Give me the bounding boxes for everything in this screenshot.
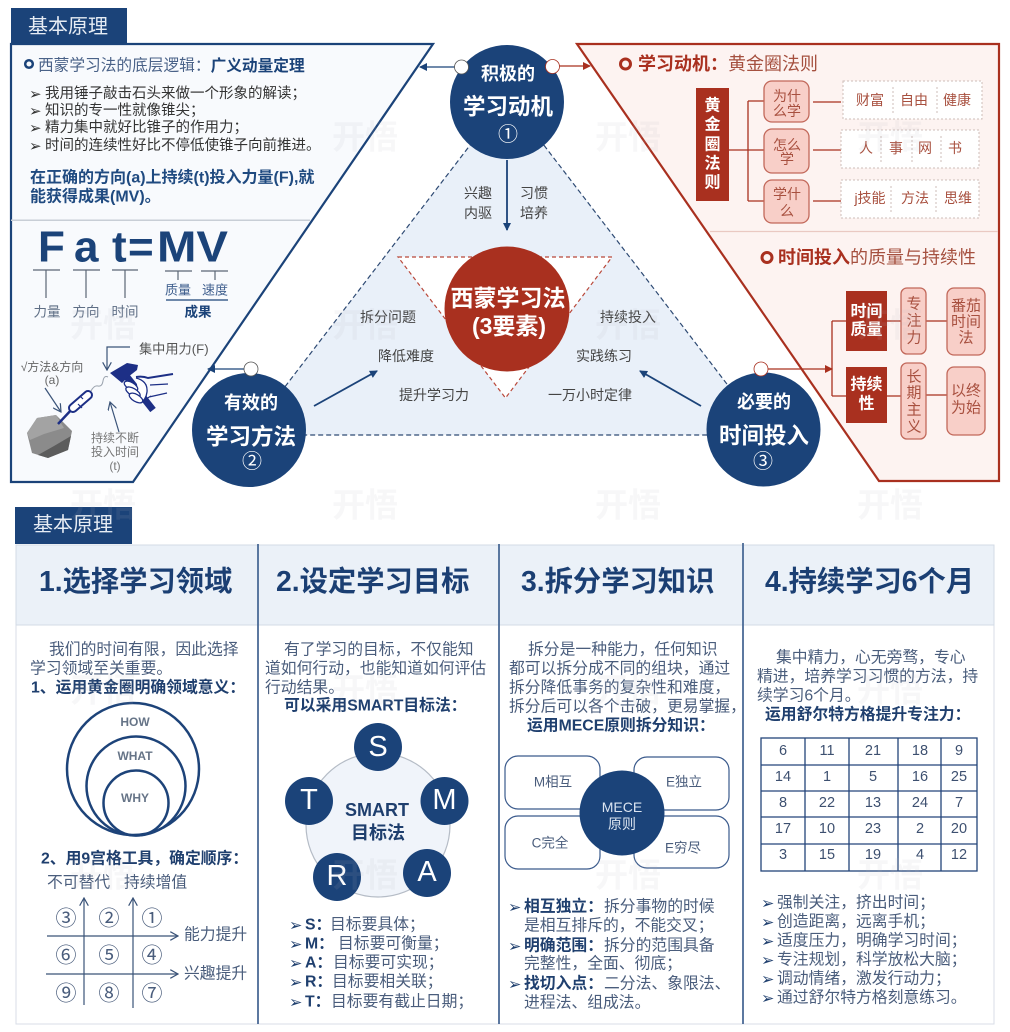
golden circle tree: 么 [780, 203, 794, 219]
Schulte grid: 3 [779, 847, 787, 863]
circle: 积极的学习动机: ① [498, 123, 518, 146]
Schulte grid: 1 [823, 769, 831, 785]
SMART list: ➢ [289, 992, 302, 1012]
formula brackets and labels: 质量 [165, 282, 191, 298]
golden circle tree: 学 [780, 151, 794, 167]
column 1 title: 1.选择学习领域 [39, 565, 232, 597]
golden circle tree: 健康 [943, 92, 971, 108]
center circle: 西蒙学习法 [444, 246, 570, 372]
SMART list: 目标要可实现； [333, 954, 444, 972]
SMART diagram [285, 723, 468, 901]
column 1 intro: 学习领域至关重要。 [30, 660, 172, 678]
Schulte grid: 25 [951, 769, 967, 785]
hammer analogy bullets: 知识的专一性就像锥尖； [45, 102, 204, 119]
SMART list: ➢ [289, 916, 302, 934]
watermark: 开悟: 开悟 [595, 306, 661, 344]
golden circle tree: 为什 [773, 88, 801, 104]
golden circle tree: 圈 [704, 136, 721, 154]
time investment heading: 时间投入的质量与持续性 [778, 248, 976, 268]
MECE diagram: E穷尽 [665, 840, 701, 856]
circle: 必要的时间投入: 必要的 [737, 392, 791, 412]
hand gripping hammer [123, 374, 173, 405]
MECE diagram: MECE [602, 799, 642, 815]
hammer analogy bullets: ➢ [29, 137, 42, 155]
SMART list: A： [305, 954, 332, 972]
nine-grid chart: ⑥ [56, 944, 76, 968]
triangle labels: 习惯 [520, 185, 548, 201]
MECE list: 拆分事物的时候 [604, 898, 715, 916]
watermark: 开悟: 开悟 [332, 486, 398, 524]
time investment tree: 番茄 [951, 298, 981, 314]
illustration: hammer, chisel and rock: √方法&方向 [21, 359, 83, 374]
Schulte grid: 7 [955, 795, 963, 811]
nine-grid chart: ① [142, 908, 162, 930]
nine-grid chart: ② [98, 908, 120, 930]
focus tips list: 专注规划，科学放松大脑； [777, 950, 967, 968]
golden circle tree: 金 [704, 114, 721, 134]
triangle labels: 兴趣 [464, 185, 492, 201]
MECE list: ➢ [508, 898, 521, 916]
bold conclusion: 能获得成果(MV)。 [30, 186, 161, 206]
formula: F a t = MV: t [112, 222, 127, 272]
SMART list: ➢ [289, 934, 302, 954]
triangle labels: 提升学习力 [399, 387, 469, 403]
SMART diagram: A [417, 856, 437, 888]
SMART list: T： [305, 994, 330, 1010]
formula: F a t = MV: F [38, 222, 65, 272]
column 1 intro [30, 640, 245, 696]
panel heading: 西蒙学习法的底层逻辑：广义动量定理 [38, 56, 305, 74]
watermark: 开悟: 开悟 [332, 118, 398, 156]
SMART list: S： [305, 916, 331, 934]
golden circle tree: 自由 [900, 92, 928, 108]
Schulte grid: 6 [779, 743, 787, 759]
nine-grid chart: ⑤ [98, 944, 120, 968]
arrow: time to core [640, 371, 701, 406]
golden circle tree: 法 [704, 154, 721, 172]
arrow: method to core [314, 371, 377, 406]
formula brackets and labels: 成果 [184, 304, 212, 320]
formula: F a t = MV [38, 222, 229, 272]
triangle labels: 内驱 [464, 205, 492, 221]
column 4 title: 4.持续学习6个月 [765, 565, 974, 597]
focus tips list: ➢ [761, 988, 774, 1008]
column 1: 选择学习领域 [30, 565, 248, 1008]
triangle labels: 拆分问题 [360, 309, 416, 325]
golden circle tree: 方法 [901, 190, 929, 206]
SMART list [289, 916, 473, 1012]
hammer analogy bullets: ➢ [29, 85, 42, 103]
column 4 intro: 集中精力，心无旁骛，专心 [776, 648, 966, 666]
circle: 必要的时间投入 [706, 362, 820, 486]
Schulte grid: 13 [865, 795, 881, 811]
watermark: 开悟: 开悟 [70, 672, 136, 708]
triangle labels: 实践练习 [576, 348, 632, 364]
circle: 积极的学习动机: 积极的 [481, 64, 535, 84]
SMART list: M： [305, 936, 334, 952]
MECE diagram [505, 756, 729, 869]
hammer handle and head [127, 377, 153, 410]
connector arrows from circles to panels [208, 66, 832, 369]
Schulte grid: 19 [865, 847, 881, 863]
Schulte grid: 11 [819, 743, 835, 759]
time investment tree: 性 [858, 394, 875, 412]
SMART list: 目标要可衡量； [338, 934, 449, 952]
SMART diagram: SMART [345, 800, 409, 820]
golden circle diagram: WHAT [117, 749, 153, 763]
time investment tree: 以终 [951, 382, 981, 400]
panel: 黄金圈法则 and 时间投入 [577, 44, 999, 481]
time investment tree: 时间 [850, 302, 883, 320]
MECE list: ➢ [508, 936, 521, 956]
golden circle tree: 财富 [856, 92, 884, 108]
circle: 有效的学习方法: 学习方法 [206, 424, 296, 450]
formula: F a t = MV: a [74, 222, 99, 272]
triangle labels [360, 185, 656, 403]
watermark: 开悟: 开悟 [595, 118, 661, 156]
Schulte grid: 15 [819, 847, 835, 863]
formula brackets and labels: 时间 [112, 304, 138, 320]
watermark: 开悟: 开悟 [332, 856, 398, 894]
nine-grid chart: ③ [56, 908, 76, 930]
time investment tree: 为始 [951, 400, 981, 416]
column 3 title: 3.拆分学习知识 [521, 565, 714, 597]
time investment tree: 长 [906, 368, 922, 386]
golden circle diagram: WHY [121, 791, 149, 805]
time investment tree: 专 [906, 296, 922, 312]
golden circle tree: 网 [918, 140, 932, 156]
golden circle diagram [67, 703, 199, 836]
nine-grid chart: 兴趣提升 [184, 964, 247, 982]
nine-grid chart: 能力提升 [184, 926, 247, 944]
circle: 积极的学习动机: 学习动机 [463, 94, 553, 120]
Schulte grid: 9 [955, 743, 963, 759]
circle: 有效的学习方法: ② [242, 450, 262, 473]
column 2 intro: 可以采用SMART目标法： [284, 696, 467, 714]
column 3 intro: 运用MECE原则拆分知识： [527, 716, 715, 734]
focus tips list: ➢ [761, 970, 774, 988]
illustration: hammer, chisel and rock: (a) [45, 373, 59, 387]
column 4 intro: 精进，培养学习习惯的方法，持 [757, 668, 978, 686]
nine-grid chart: 不可替代 [47, 874, 110, 892]
focus tips list: ➢ [761, 932, 774, 950]
nine-grid chart: ⑧ [98, 982, 120, 1006]
watermark: 开悟: 开悟 [332, 672, 398, 708]
inverted red triangle [398, 257, 612, 398]
time investment tree: 时间 [951, 314, 981, 330]
MECE list: 进程法、组成法。 [524, 994, 650, 1012]
circle: 必要的时间投入: ③ [753, 450, 773, 473]
golden circle tree: j技能 [853, 190, 886, 206]
circle: 积极的学习动机 [450, 45, 564, 159]
central triangle diagram [248, 97, 766, 435]
triangle labels: 持续投入 [600, 309, 656, 325]
time investment tree: 主 [906, 402, 922, 418]
illustration: hammer, chisel and rock: 持续不断 [91, 430, 139, 445]
arrow: motivation to core [506, 160, 508, 230]
formula: F a t = MV: = [128, 222, 154, 272]
Schulte grid: 24 [912, 795, 928, 811]
circle: 有效的学习方法: 有效的 [224, 393, 278, 413]
SMART list: ➢ [289, 972, 302, 992]
golden circle tree: 么学 [773, 103, 801, 119]
Schulte grid: 4 [916, 847, 924, 863]
watermark: 开悟: 开悟 [70, 306, 136, 344]
focus tips list: 通过舒尔特方格刻意练习。 [777, 988, 967, 1006]
MECE list: 完整性，全面、彻底； [524, 954, 682, 972]
column 3 intro: 都可以拆分成不同的组块，通过 [509, 660, 730, 678]
triangle labels: 培养 [520, 205, 548, 221]
column 1 intro: 我们的时间有限，因此选择 [49, 640, 239, 658]
time investment tree: 法 [958, 330, 974, 346]
bold conclusion: 在正确的方向(a)上持续(t)投入力量(F),就 [30, 168, 314, 186]
nine-grid chart: ⑨ [56, 982, 76, 1006]
triangle labels: 一万小时定律 [548, 387, 632, 403]
focus tips list: ➢ [761, 894, 774, 912]
column 3 intro: 拆分降低事务的复杂性和难度， [509, 678, 730, 696]
center circle: 西蒙学习法: 西蒙学习法 [450, 285, 566, 311]
bold conclusion [30, 168, 314, 206]
column 2 intro: 行动结果。 [265, 678, 344, 696]
triangle labels: 降低难度 [378, 348, 434, 364]
golden circle tree: 怎么 [773, 137, 801, 153]
SMART list: ➢ [289, 954, 302, 972]
watermark: 开悟: 开悟 [857, 486, 923, 524]
Schulte grid: 22 [819, 795, 835, 811]
column 4 intro: 运用舒尔特方格提升专注力： [765, 704, 970, 724]
watermark: 开悟: 开悟 [857, 672, 923, 708]
SMART diagram: M [432, 784, 457, 816]
nine-grid chart [46, 874, 247, 1008]
Schulte grid: 21 [865, 743, 881, 759]
time investment tree [832, 288, 985, 439]
column 3 intro [509, 640, 746, 734]
watermark: 开悟: 开悟 [857, 118, 923, 156]
column 2: 设定学习目标 [265, 565, 486, 1012]
time investment tree: 持续 [850, 376, 883, 394]
Schulte grid: 12 [951, 847, 967, 863]
column 4 intro: 续学习6个月。 [757, 686, 861, 704]
MECE diagram: 原则 [608, 816, 636, 832]
MECE list: 找切入点： [524, 974, 603, 992]
heading tab: lower 基本原理 [15, 507, 132, 544]
watermark: 开悟: 开悟 [332, 306, 398, 344]
hammer analogy bullets: ➢ [29, 119, 42, 137]
heading tab: top 基本原理 [11, 8, 127, 45]
column 4: 持续学习6个月 [757, 565, 978, 1008]
illustration: hammer, chisel and rock: 投入时间 [91, 444, 139, 459]
time investment tree: 期 [906, 384, 922, 402]
hammer analogy bullets: 我用锤子敲击石头来做一个形象的解读； [45, 85, 306, 102]
MECE diagram: M相互 [534, 774, 572, 790]
nine-grid chart: ⑦ [142, 982, 162, 1006]
MECE list: 是相互排斥的，不能交叉； [524, 916, 714, 934]
MECE diagram: E独立 [666, 774, 702, 790]
formula brackets and labels: 方向 [72, 304, 100, 320]
table frame with four columns [16, 543, 994, 1024]
focus tips list: 强制关注，挤出时间； [777, 894, 935, 912]
focus tips list: 调动情绪，激发行动力； [777, 970, 951, 988]
golden circle tree: 则 [704, 174, 721, 192]
golden circle tree: 黄 [704, 96, 721, 114]
Schulte grid [761, 738, 977, 871]
circle: 必要的时间投入: 时间投入 [719, 424, 809, 448]
SMART list: 目标要有截止日期； [331, 992, 473, 1010]
watermark: 开悟: 开悟 [857, 856, 923, 894]
illustration: hammer, chisel and rock: (t) [109, 459, 121, 473]
illustration: hammer, chisel and rock: 集中用力(F) [139, 342, 209, 356]
time investment tree: 质量 [850, 320, 883, 338]
hammer analogy bullets [29, 85, 320, 155]
watermark: 开悟: 开悟 [70, 486, 136, 524]
hammer analogy bullets: 精力集中就好比锥子的作用力； [45, 119, 248, 136]
Schulte grid: 16 [912, 769, 928, 785]
golden circle tree: 学什 [773, 186, 801, 202]
focus tips list: ➢ [761, 912, 774, 932]
column 3 intro: 拆分后可以各个击破，更易掌握， [509, 698, 746, 716]
column 2 title: 2.设定学习目标 [276, 565, 469, 597]
formula brackets and labels: 速度 [202, 282, 228, 298]
Schulte grid: 23 [865, 821, 881, 837]
golden circle tree: 书 [948, 140, 962, 156]
nine-grid chart: 持续增值 [124, 874, 187, 892]
MECE list: ➢ [508, 974, 521, 994]
column 3: 拆分学习知识 [505, 565, 746, 1012]
SMART list: 目标要具体； [330, 916, 425, 934]
SMART diagram: 目标法 [351, 823, 405, 843]
column 4 intro [757, 648, 978, 724]
Schulte grid: 17 [775, 821, 791, 837]
hammer analogy bullets: 时间的连续性好比不停低使锥子向前推进。 [45, 137, 320, 154]
focus tips list: 适度压力，明确学习时间； [777, 932, 967, 950]
Schulte grid: 18 [912, 743, 928, 759]
formula: F a t = MV: MV [157, 222, 229, 272]
golden circle tree [696, 81, 982, 223]
MECE list: 明确范围： [524, 936, 603, 954]
circle: 有效的学习方法 [192, 362, 306, 487]
nine-grid chart: ④ [142, 944, 162, 968]
MECE list: 相互独立： [524, 896, 603, 916]
watermark: 开悟: 开悟 [857, 306, 923, 344]
formula brackets and labels: 力量 [34, 304, 60, 320]
golden circle heading: 学习动机：黄金圈法则 [638, 53, 818, 74]
center circle: 西蒙学习法: (3要素) [472, 313, 546, 339]
column 2 intro: 道如何行动，也能知道如何评估 [265, 660, 486, 678]
Schulte grid: 14 [775, 769, 791, 785]
MECE list [508, 896, 730, 1012]
SMART diagram: R [327, 860, 347, 892]
focus tips list: 创造距离，远离手机； [777, 912, 935, 930]
Schulte grid: 5 [869, 769, 877, 785]
column 1 intro: 1、运用黄金圈明确领域意义： [31, 678, 245, 696]
golden circle tree: 人 [859, 140, 873, 156]
hammer analogy bullets: ➢ [29, 102, 42, 120]
watermark: 开悟: 开悟 [595, 672, 661, 708]
column 2 intro [265, 640, 486, 714]
Schulte grid: 8 [779, 795, 787, 811]
SMART diagram: T [300, 784, 318, 816]
formula brackets and labels [33, 270, 228, 320]
nine-grid heading: 2、用9宫格工具，确定顺序： [41, 848, 248, 868]
panel: 广义动量定理 [11, 44, 433, 482]
golden circle diagram: HOW [120, 715, 150, 729]
Schulte grid: 2 [916, 821, 924, 837]
heading tab: top 基本原理: 基本原理 [28, 15, 108, 38]
golden circle tree: 思维 [944, 190, 972, 206]
heading tab: lower 基本原理: 基本原理 [33, 513, 113, 536]
SMART list: R： [305, 974, 332, 990]
MECE list: 二分法、象限法、 [604, 974, 730, 992]
time investment tree: 力 [906, 330, 922, 346]
time investment tree: 义 [906, 418, 922, 436]
watermark: 开悟 [70, 118, 923, 894]
focus tips list: ➢ [761, 950, 774, 970]
watermark: 开悟: 开悟 [595, 486, 661, 524]
SMART list: 目标要相关联； [332, 972, 443, 990]
illustration: hammer, chisel and rock [21, 342, 209, 473]
MECE diagram: C完全 [532, 834, 569, 850]
column 3 intro: 拆分是一种能力，任何知识 [528, 640, 718, 658]
Schulte grid: 10 [819, 821, 835, 837]
watermark: 开悟: 开悟 [70, 856, 136, 894]
SMART diagram: S [368, 731, 388, 763]
MECE list: 拆分的范围具备 [604, 936, 715, 954]
column 2 intro: 有了学习的目标，不仅能知 [284, 640, 474, 658]
focus tips list [761, 894, 967, 1008]
watermark: 开悟: 开悟 [595, 856, 661, 894]
Schulte grid: 20 [951, 821, 967, 837]
golden circle tree: 事 [889, 140, 903, 156]
time investment tree: 注 [906, 312, 922, 330]
